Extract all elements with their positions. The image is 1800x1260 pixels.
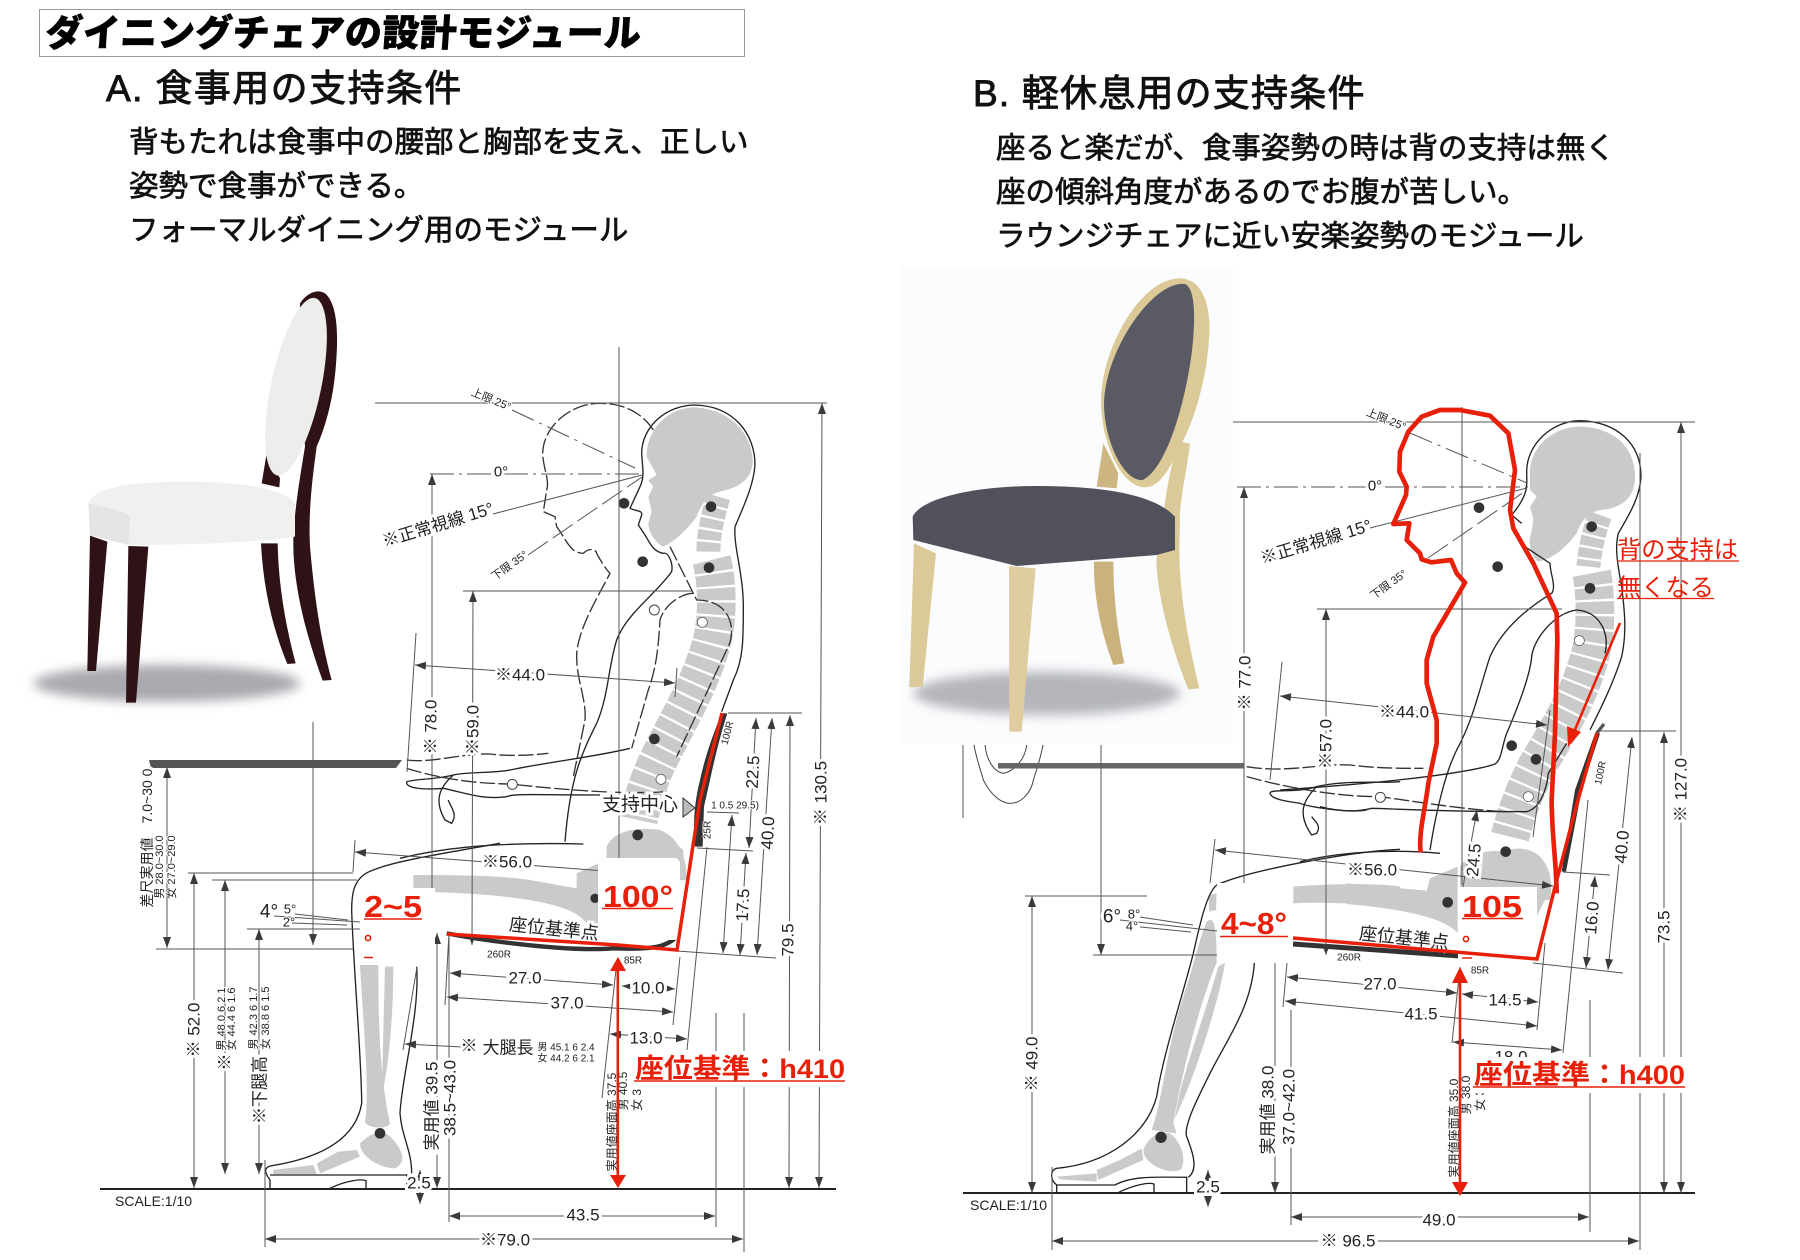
- dimension labels B: ※56.0: [1347, 860, 1397, 880]
- callout: back support disappears: 背の支持は: [1617, 536, 1738, 564]
- skeleton B upper: skull, spine, pelvis: [1490, 427, 1635, 900]
- dimension labels B: ※ 127.0: [1672, 758, 1690, 822]
- dimension labels B: 24.5: [1463, 843, 1485, 877]
- dimension labels A: 男 42.3 6 1.7: [248, 986, 260, 1050]
- floor line A: [100, 1188, 836, 1190]
- red outline: upright posture silhouette: [1393, 410, 1557, 893]
- dimension labels B: 37.0~42.0: [1280, 1069, 1298, 1145]
- dimension labels A: ※正常視線 15°: [380, 499, 496, 551]
- dimension labels A: 大腿長: [482, 1038, 534, 1058]
- dimension labels A: 100R: [720, 720, 736, 746]
- dimension labels B: 実用値座面高 35.0: [1446, 1078, 1461, 1177]
- dimension labels A: 25R: [702, 821, 714, 839]
- floor line B: [963, 1192, 1695, 1194]
- dimension lines A: [156, 347, 827, 1252]
- dimension labels A: 支持中心: [602, 794, 678, 816]
- dimension labels A: ※44.0: [495, 666, 545, 684]
- diagram B: seated posture, light rest support: [963, 406, 1739, 1250]
- dimension labels B: ※57.0: [1316, 719, 1336, 769]
- red arrow: seat height A: [610, 957, 626, 1188]
- text block: section A description: フォーマルダイニング用のモジュール: [129, 214, 628, 247]
- joint markers A: [507, 498, 716, 840]
- dimension labels A: 実用値座面高 37.5: [604, 1072, 619, 1171]
- dimension labels A: 女 3: [630, 1089, 644, 1111]
- skeleton A upper: skull, spine, pelvis: [607, 407, 753, 880]
- dimension labels A: 女 44.2 6 2.1: [537, 1052, 595, 1064]
- dimension labels A: ※ 130.5: [812, 761, 830, 825]
- dimension labels A: ※下腿高: [250, 1056, 270, 1124]
- callout: seat angle 2~5: 2~5: [364, 889, 422, 924]
- dimension labels A: 女 27.0~29.0: [165, 835, 178, 899]
- dimension labels B: 260R: [1337, 952, 1361, 964]
- dimension labels B: 0°: [1368, 478, 1382, 494]
- backrest and seat shell B: [1562, 724, 1604, 872]
- red arrow: seat height B: [1452, 967, 1468, 1196]
- body outlines A: head, torso, arm: [400, 403, 755, 858]
- dimension labels A: ※79.0: [480, 1230, 530, 1250]
- skeleton A lower: thigh, hip: [413, 834, 684, 933]
- dimension labels B: 座位基準点: [1358, 923, 1450, 953]
- dimension labels B: 14.5: [1488, 990, 1522, 1010]
- dimension labels B: ※ 96.5: [1321, 1232, 1375, 1250]
- dimension labels B: 実用値 38.0: [1258, 1066, 1278, 1154]
- callout: seat reference height h410: 座位基準：h410: [635, 1054, 845, 1084]
- table A: [149, 760, 402, 768]
- white masks behind red callouts A: [360, 858, 846, 1087]
- dimension labels A: 27.0: [508, 968, 542, 988]
- dimension labels A: ※ 78.0: [422, 700, 440, 754]
- dimension labels B: 男 38.0: [1459, 1075, 1473, 1114]
- dimension labels B: 4°: [1126, 918, 1138, 934]
- dimension lines B: [963, 407, 1695, 1250]
- dimension labels A: 差尺実用値 7.0~30 0: [139, 768, 155, 907]
- callout: seat angle 2~5: [364, 889, 422, 958]
- dimension labels A: 22.5: [743, 755, 763, 789]
- skeleton B lower: thigh, hip: [1347, 851, 1550, 933]
- dimension labels A: 43.5: [566, 1206, 600, 1224]
- dimension labels B: 41.5: [1404, 1004, 1438, 1024]
- callout: back angle 105°: [1462, 889, 1523, 958]
- callout: back support disappears: [1617, 536, 1739, 602]
- dimension labels A: 37.0: [550, 994, 584, 1012]
- heading: section B: B. 軽休息用の支持条件: [973, 73, 1366, 114]
- dimension labels A: 13.0: [629, 1028, 663, 1048]
- red seat and back profile A: [447, 713, 722, 950]
- heading: section A: A. 食事用の支持条件: [106, 68, 463, 109]
- dimension labels A: 男 45.1 6 2.4: [537, 1042, 595, 1054]
- dimension labels A: ※59.0: [464, 705, 482, 755]
- dimension labels B: 18.0: [1494, 1048, 1528, 1066]
- skeleton B leg and foot bones: [1057, 884, 1400, 1182]
- text block: section B description: ラウンジチェアに近い安楽姿勢のモジュール: [996, 220, 1584, 253]
- callout: back support disappears: 無くなる: [1617, 574, 1714, 602]
- dimension labels B: 16.0: [1581, 901, 1603, 935]
- dimension labels B: SCALE:1/10: [970, 1197, 1047, 1213]
- callout: back angle 100°: 100°: [603, 879, 673, 914]
- dimension labels B: 40.0: [1611, 830, 1633, 864]
- dimension labels A: 男 48.0 6 2.1: [216, 988, 228, 1050]
- text block: section B description: [996, 132, 1615, 253]
- dimension labels A: 5°: [284, 902, 296, 916]
- dimension labels A: 下限 35°: [489, 548, 530, 583]
- text block: section B description: 座ると楽だが、食事姿勢の時は背の支持は無く: [996, 132, 1615, 165]
- text block: section A description: 姿勢で食事ができる。: [129, 170, 423, 203]
- dimension labels B: 2.5: [1196, 1178, 1220, 1196]
- dimension labels A: 実用値 39.5: [422, 1062, 442, 1150]
- white masks behind red callouts B: [1217, 883, 1688, 1093]
- diagram A: seated posture, dining support: [100, 347, 846, 1252]
- table B: [998, 763, 1244, 768]
- hand and forearm B: [1270, 782, 1400, 835]
- dimension labels A: 4°: [260, 902, 278, 922]
- chair photo B: light wood chair with grey upholstery: [900, 267, 1233, 743]
- backrest and seat shell A: [447, 713, 727, 949]
- dimension labels A: 0°: [494, 464, 508, 480]
- dimension labels B: ※ 49.0: [1022, 1037, 1042, 1091]
- dimension labels B: ※正常視線 15°: [1258, 516, 1374, 568]
- dimension labels A: 座位基準点: [508, 914, 600, 944]
- dimension labels A: ※ 52.0: [184, 1003, 204, 1057]
- dimension labels B: 下限 35°: [1368, 567, 1409, 602]
- title box: [39, 9, 745, 57]
- dimension labels B: 女 3: [1473, 1089, 1487, 1111]
- dimension labels A: 1 0.5 29.5): [711, 800, 759, 812]
- dimension labels B: 85R: [1471, 966, 1489, 976]
- dimension labels A: 女 38.8 6 1.5: [259, 986, 272, 1050]
- dimension labels B: 100R: [1593, 760, 1609, 786]
- dimension labels B: 6°: [1103, 906, 1121, 928]
- dimension labels A: 2.5: [407, 1174, 431, 1192]
- dimension labels A: 260R: [487, 950, 511, 960]
- leg outline B: [974, 745, 1400, 1193]
- dimension labels B: 49.0: [1422, 1210, 1456, 1230]
- seat shell underside B: [1293, 944, 1460, 956]
- text block: section A description: 背もたれは食事中の腰部と胸部を支え、正しい: [129, 126, 749, 159]
- dimension labels B: ※ 77.0: [1236, 656, 1254, 710]
- dimension labels A: 10.0: [631, 978, 665, 998]
- text block: section B description: 座の傾斜角度があるのでお腹が苦しい。: [996, 176, 1527, 209]
- dimension labels A: ※56.0: [482, 852, 532, 872]
- dimension labels B: [970, 406, 1690, 1250]
- dimension labels A: 男 28.0~30.0: [154, 835, 166, 899]
- dimension labels B: 27.0: [1363, 974, 1397, 994]
- dimension labels B: 8°: [1128, 906, 1140, 922]
- dimension labels A: 女 44.4 6 1.6: [225, 988, 238, 1050]
- joint markers B: [1375, 502, 1597, 857]
- text block: section A description: [129, 126, 749, 247]
- red seat and back profile B: [1293, 733, 1597, 959]
- dimension labels A: 38.5~43.0: [440, 1060, 460, 1136]
- leg outline A: [266, 843, 500, 1188]
- dimension labels A: 17.5: [733, 888, 753, 922]
- red arrow: loss of back support: [1567, 623, 1620, 747]
- dimension labels B: 73.5: [1654, 910, 1674, 944]
- dimension labels A: [115, 386, 830, 1249]
- skeleton A leg and foot bones: [273, 965, 402, 1174]
- dimension labels B: ※44.0: [1379, 702, 1429, 722]
- dimension labels A: 2°: [283, 914, 295, 930]
- dimension labels A: 男 40.5: [616, 1071, 630, 1110]
- dimension labels A: 79.5: [778, 923, 798, 957]
- dimension labels B: 上限 25°: [1364, 406, 1408, 433]
- dimension labels A: ※: [216, 1054, 234, 1070]
- dimension labels A: 40.0: [758, 816, 778, 850]
- callout: seat angle 4~8°: 4~8°: [1221, 906, 1287, 941]
- dimension labels A: SCALE:1/10: [115, 1193, 192, 1209]
- callout: seat reference height h400: 座位基準：h400: [1474, 1060, 1685, 1090]
- dimension labels A: 上限 25°: [469, 386, 513, 413]
- chair photo A: dark wood dining chair: [33, 291, 339, 703]
- dimension labels A: 85R: [624, 956, 642, 966]
- dimension labels A: ※: [460, 1036, 478, 1056]
- title text: ダイニングチェアの設計モジュール: [44, 13, 643, 54]
- callout: back angle 105°: 105: [1462, 889, 1522, 924]
- body outlines B: head, torso, arm: [1247, 421, 1641, 862]
